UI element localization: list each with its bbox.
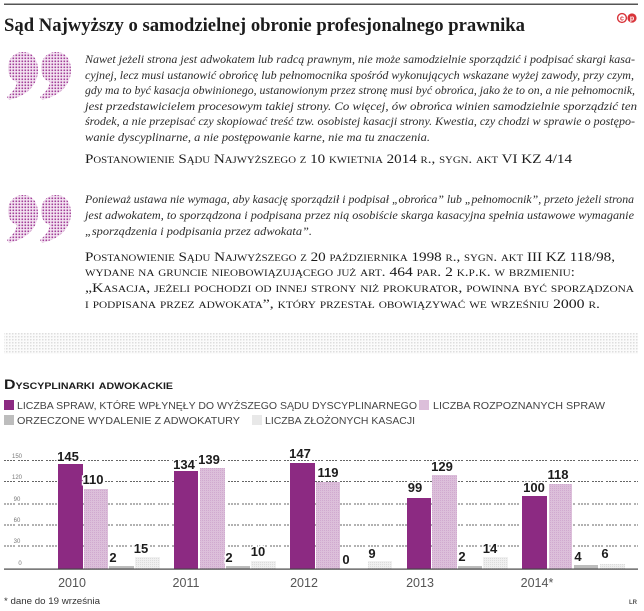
text block: first quote: [83, 53, 637, 144]
bars 2011: 139: [198, 452, 220, 467]
legend: LICZBA ROZPOZNANYCH SPRAW: [433, 400, 605, 412]
legend: [4, 399, 605, 427]
icon: first quotation mark: [7, 52, 71, 100]
bars 2010: 110: [83, 472, 103, 487]
bars 2014: 6: [601, 546, 609, 561]
bars 2013: 2: [458, 549, 466, 564]
bars 2012: 9: [368, 546, 376, 561]
icon: copyright and premium logo: p: [630, 16, 634, 22]
icon: second quotation mark: [7, 195, 71, 243]
text block: second quote: Ponieważ ustawa nie wymaga, aby kasację sporządził i podpisał „obrońca” lub „pełnomocnik”, przeto jeżeli strona: [84, 193, 634, 206]
bars 2010: 2010: [58, 576, 86, 590]
bars 2012: 119: [318, 465, 338, 480]
citation: second ruling: [85, 250, 635, 311]
y axis gridlines and labels: 90: [14, 497, 21, 503]
bars 2013: 129: [431, 459, 453, 474]
bars 2011: 10: [251, 544, 265, 559]
y axis gridlines and labels: 30: [14, 539, 21, 545]
bars 2013: 2013: [406, 576, 434, 590]
text block: second quote: „sporządzenia i podpisania przez adwokata”.: [85, 225, 312, 238]
citation: second ruling: wydane na gruncie nieobowiązującego już art. 464 par. 2 k.p.k. w brzmieniu:: [85, 265, 575, 279]
text block: first quote: wanie dyscyplinarne, a nie postępowanie karne, nie ma tu znaczenia.: [85, 131, 430, 144]
bars 2010: 2: [109, 550, 117, 565]
icon: copyright and premium logo: [618, 13, 637, 23]
legend: LICZBA SPRAW, KTÓRE WPŁYNĘŁY DO WYŻSZEGO SĄDU DYSCYPLINARNEGO: [17, 399, 417, 412]
bars 2012: 2012: [290, 576, 318, 590]
legend: ORZECZONE WYDALENIE Z ADWOKATURY: [17, 415, 240, 427]
bars 2014: 2014*: [521, 576, 553, 590]
bars 2014: [521, 467, 625, 590]
text block: second quote: [83, 193, 634, 238]
text block: first quote: cyjnej, lecz musi ustanowić obrońcę lub pełnomocnika spośród wykonujących wskazane wyżej zawody, przy czym,: [85, 69, 634, 82]
citation: second ruling: „Kasacja, jeżeli pochodzi od innej strony niż prokurator, powinna być sporządzona: [85, 281, 635, 295]
y axis gridlines and labels: [4, 454, 638, 567]
bars 2010: [57, 449, 160, 590]
text block: second quote: jest adwokatem, to sporządzona i podpisana przez nią osobiście skarga kasacyjna spełnia ustawowe wymaganie: [83, 209, 634, 222]
bars 2011: 2: [225, 550, 233, 565]
bars 2011: 134: [173, 457, 196, 472]
citation: first ruling: Postanowienie Sądu Najwyższego z 10 kwietnia 2014 r., sygn. akt VI KZ 4/14: [85, 152, 573, 166]
title: Sąd Najwyższy o samodzielnej obronie profesjonalnego prawnika: [4, 15, 525, 36]
chart heading: Dyscyplinarki adwokackie: [4, 377, 173, 392]
legend: LICZBA ZŁOŻONYCH KASACJI: [265, 414, 415, 427]
citation: second ruling: i podpisana przez adwokata”, który przestał obowiązywać we wrześniu 2000 r.: [85, 297, 600, 311]
bars 2010: 145: [57, 449, 79, 464]
author credit: LR: [629, 600, 638, 606]
citation: second ruling: Postanowienie Sądu Najwyższego z 20 października 1998 r., sygn. akt III KZ 118/98,: [85, 250, 615, 264]
y axis gridlines and labels: 0: [18, 561, 22, 567]
y axis gridlines and labels: 150: [12, 454, 23, 460]
y axis gridlines and labels: 60: [14, 518, 21, 524]
text block: first quote: środek, a nie przepisać czy skopiować treść tzw. osobistej kasacji strony. Kwestia, czy chodzi w sprawie o postępo-: [85, 115, 635, 128]
bars 2012: 0: [342, 552, 350, 567]
bars 2012: 147: [289, 446, 311, 461]
bars 2014: 100: [523, 480, 545, 495]
bars 2014: 118: [548, 467, 568, 482]
bar chart: [4, 446, 638, 590]
bars 2011: 2011: [173, 576, 199, 590]
bars 2013: [406, 459, 508, 590]
bars 2014: 4: [574, 549, 582, 564]
bars 2012: [289, 446, 392, 590]
icon: copyright and premium logo: c: [620, 16, 624, 22]
bars 2011: [173, 452, 276, 590]
bars 2010: 15: [134, 541, 148, 556]
bars 2013: 99: [408, 480, 422, 495]
bars 2013: 14: [483, 541, 498, 556]
text block: first quote: gdy ma to być kasacja obwinionego, ustanowionym przez stronę musi być obrońca, jako że to on, a nie pełnomocnik,: [85, 84, 635, 97]
text block: first quote: jest przedstawicielem procesowym takiej strony. Co więcej, ów obrońca winien samodzielnie sporządzić ten: [83, 100, 637, 113]
text block: first quote: Nawet jeżeli strona jest adwokatem lub radcą prawnym, nie może samodzielnie sporządzić i podpisać skargi kasa-: [84, 53, 635, 66]
footnote: * dane do 19 września: [4, 596, 101, 607]
y axis gridlines and labels: 120: [12, 475, 23, 481]
